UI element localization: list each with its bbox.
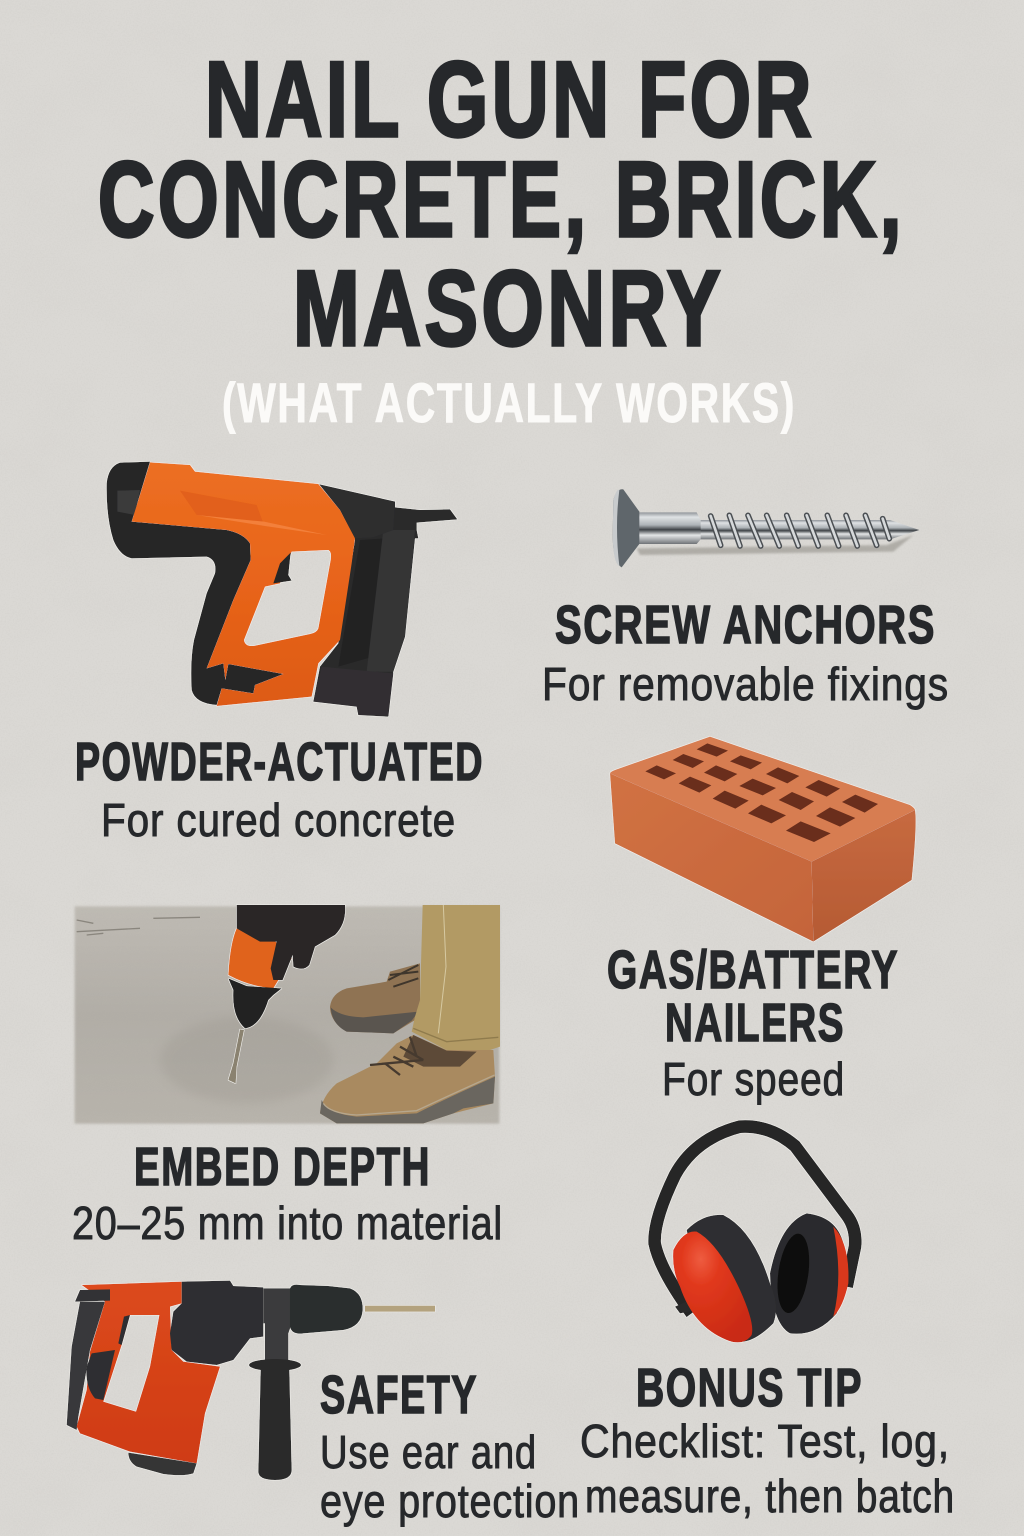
text: measure, then batch (585, 1470, 955, 1522)
photo: drilling into concrete slab (75, 905, 500, 1124)
text: For removable fixings (542, 658, 949, 710)
panel: embed depth (72, 905, 503, 1249)
panel: bonus tip (580, 1126, 955, 1522)
concrete floor (75, 906, 499, 1124)
icon: red rotary hammer drill (67, 1281, 435, 1480)
text: Checklist: Test, log, (580, 1415, 950, 1467)
title (98, 39, 905, 368)
title: MASONRY (293, 248, 724, 368)
text (320, 1426, 580, 1527)
heading (607, 940, 899, 1053)
title: NAIL GUN FOR (205, 39, 815, 159)
panel: powder-actuated (75, 462, 484, 846)
text (580, 1415, 955, 1522)
heading: NAILERS (665, 993, 845, 1053)
text: eye protection (320, 1475, 580, 1527)
panel: safety (67, 1281, 580, 1527)
text: Use ear and (320, 1426, 537, 1478)
heading: GAS/BATTERY (607, 940, 899, 1000)
icon: perforated brick (610, 737, 916, 942)
icon: screw (613, 489, 919, 567)
heading: EMBED DEPTH (134, 1137, 431, 1197)
text: 20–25 mm into material (72, 1197, 503, 1249)
panel: gas/battery nailers (607, 737, 916, 1105)
text: For speed (662, 1053, 845, 1105)
heading: SAFETY (320, 1365, 478, 1425)
icon: orange nail gun (107, 462, 457, 717)
text: For cured concrete (101, 794, 456, 846)
icon: red ear muffs (655, 1126, 855, 1342)
heading: BONUS TIP (636, 1358, 863, 1418)
subtitle: (WHAT ACTUALLY WORKS) (222, 371, 796, 434)
heading: POWDER-ACTUATED (75, 732, 484, 792)
panel: screw anchors (542, 489, 949, 710)
rotary hammer with gloved hand (228, 905, 345, 1083)
trousers and boots (320, 905, 500, 1123)
